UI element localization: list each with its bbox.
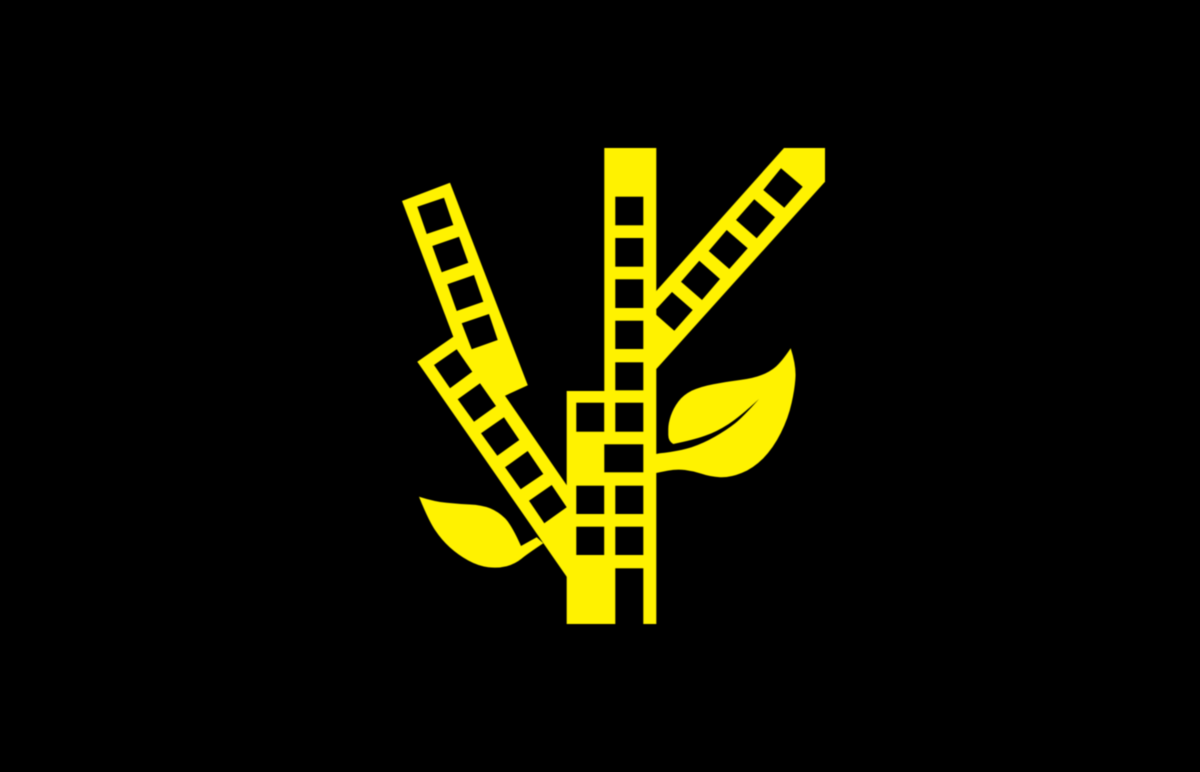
right diagonal branch: [650, 148, 825, 376]
left leaf: [419, 497, 543, 568]
central tower: [604, 148, 656, 624]
lower left branch: [417, 337, 570, 582]
left tower: [567, 391, 617, 624]
upper left branch: [402, 183, 528, 400]
right leaf: [656, 348, 796, 477]
